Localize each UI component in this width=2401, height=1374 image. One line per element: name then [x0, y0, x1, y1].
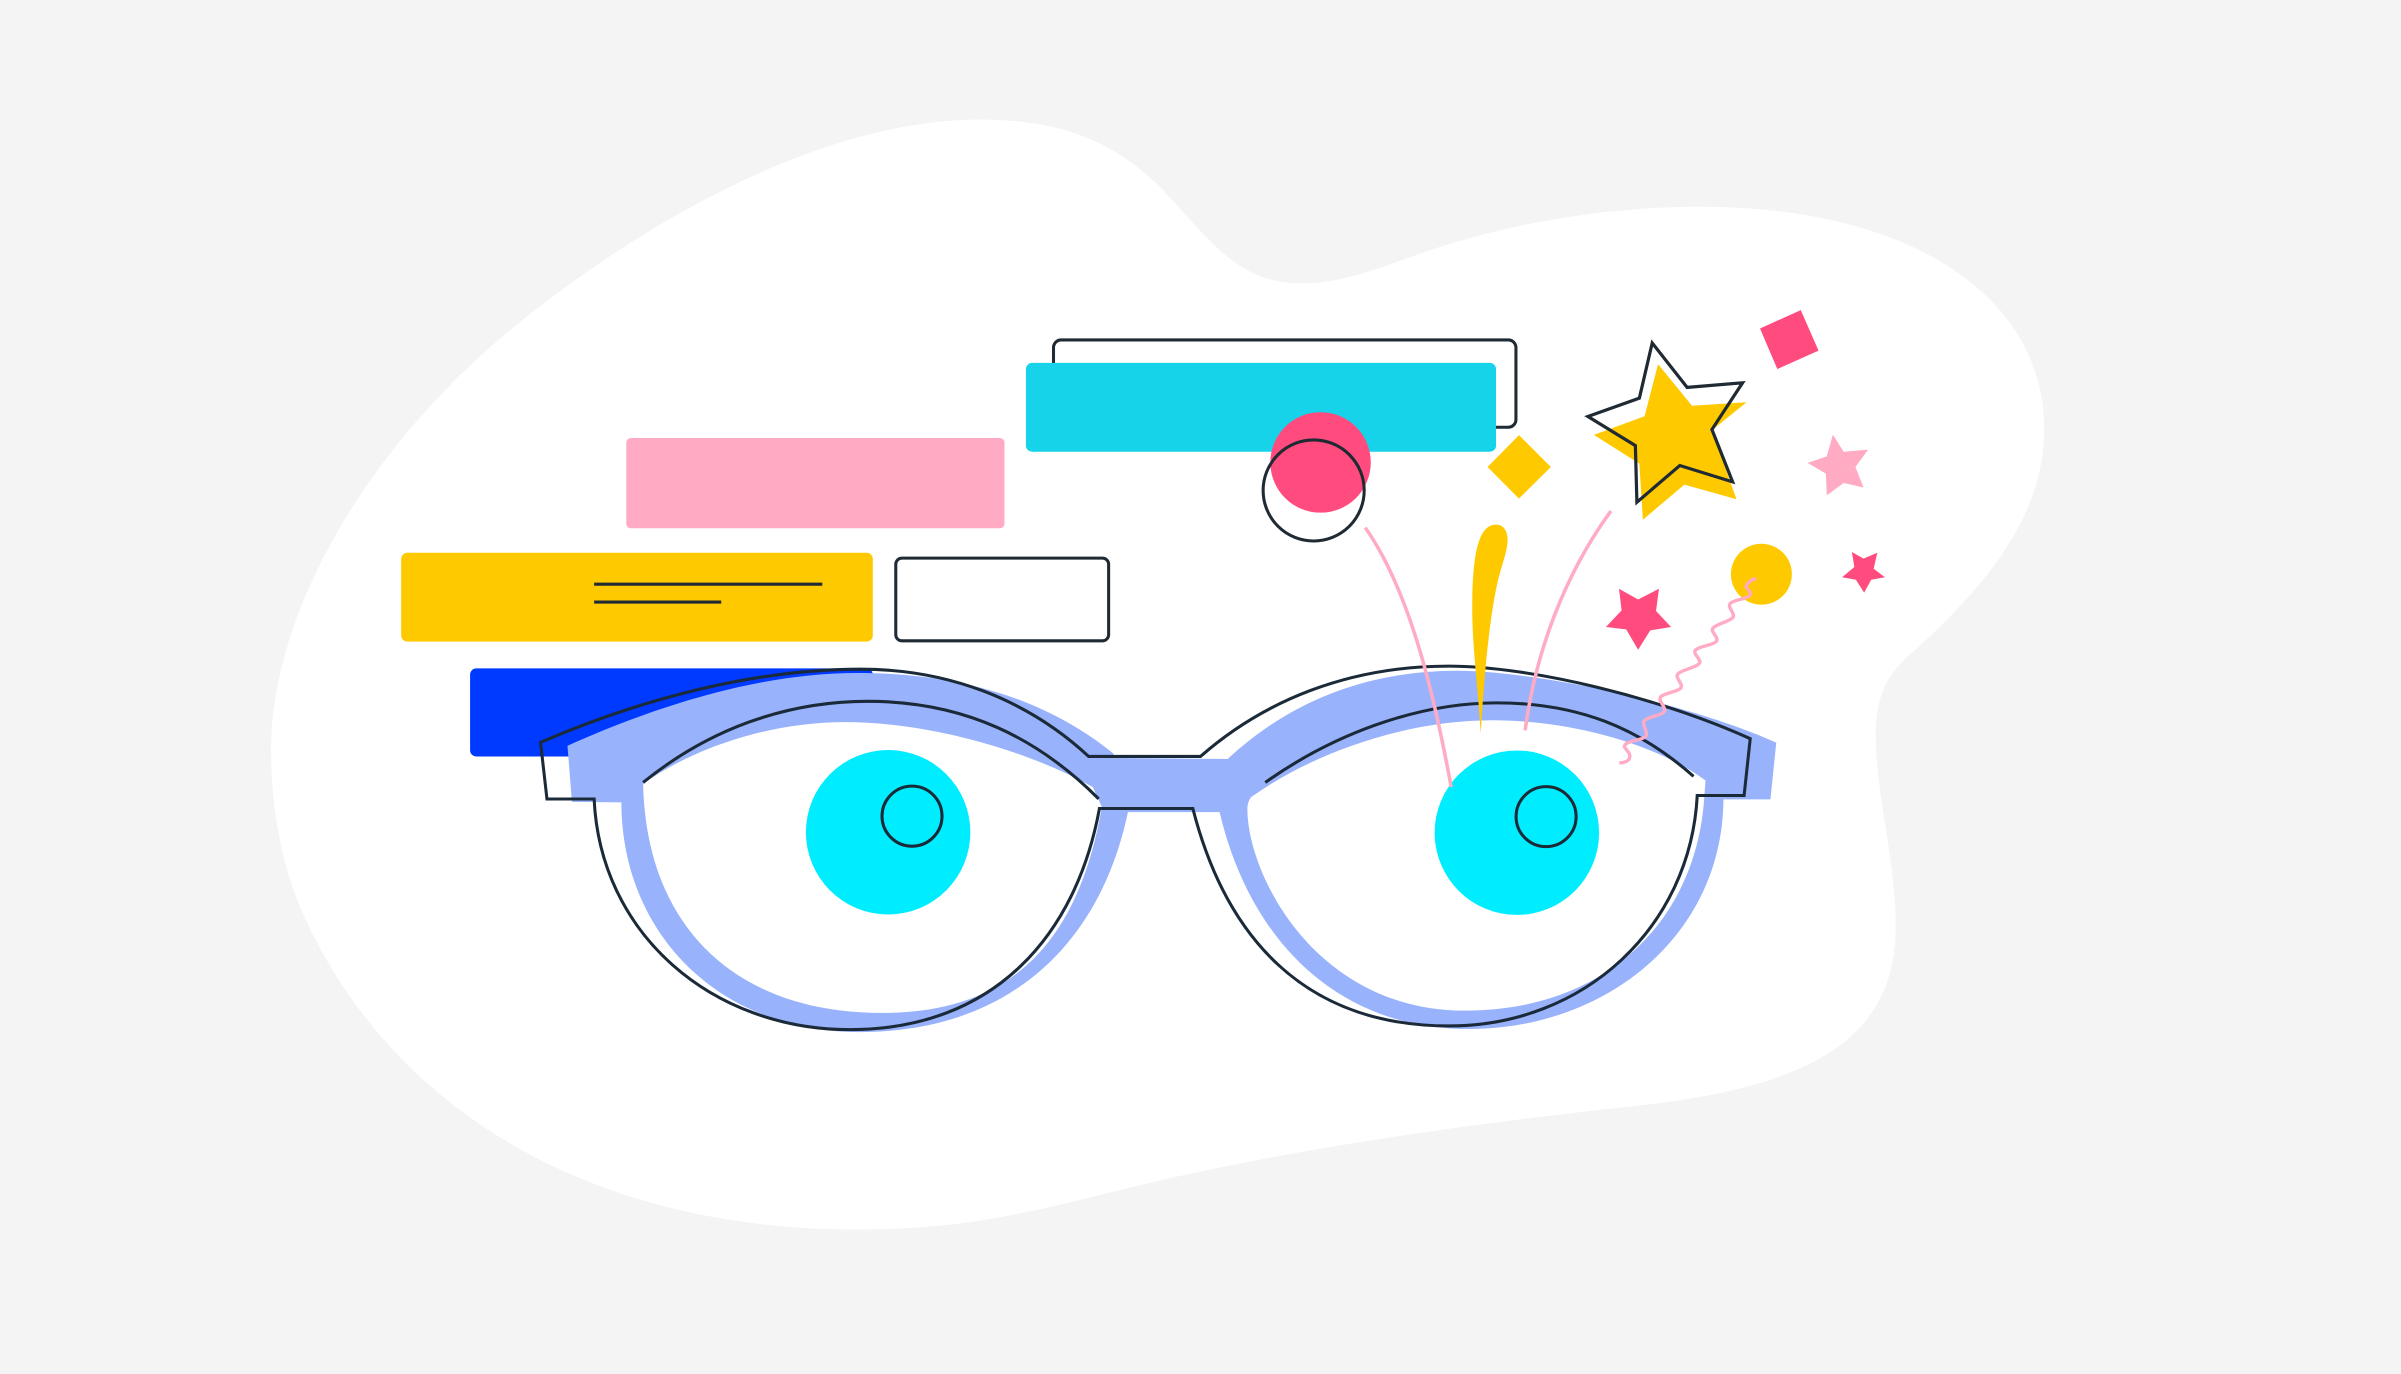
left lens opening — [643, 722, 1102, 1013]
pink diamond — [1760, 310, 1819, 369]
outlined star — [1588, 343, 1743, 502]
glasses — [541, 666, 1776, 1032]
left eye — [806, 750, 970, 914]
right pink line — [1525, 511, 1611, 730]
glasses frame fill — [567, 671, 1776, 1032]
yellow circle — [1731, 544, 1792, 605]
blue bar — [470, 668, 873, 756]
right pupil ring — [1516, 787, 1576, 847]
pink circle — [1270, 412, 1371, 513]
pink bar — [626, 438, 1004, 528]
right eye — [1435, 750, 1599, 915]
left pink line — [1365, 528, 1451, 787]
outlined circle — [1263, 440, 1364, 541]
left brow inner line — [643, 701, 1099, 799]
pink squiggle — [1619, 579, 1756, 763]
yellow star — [1594, 364, 1747, 520]
light pink star — [1808, 435, 1868, 495]
glasses outline — [541, 666, 1750, 1030]
yellow drop — [1472, 525, 1508, 733]
right brow inner line — [1265, 703, 1694, 782]
outlined bar middle — [896, 558, 1109, 641]
small pink star — [1842, 552, 1885, 593]
yellow diamond — [1488, 435, 1551, 499]
middle pink star — [1606, 589, 1671, 650]
outlined bar top — [1054, 340, 1516, 427]
cyan bar — [1026, 363, 1496, 452]
right lens opening — [1247, 720, 1706, 1011]
yellow bar with text lines — [401, 553, 873, 642]
left pupil ring — [882, 786, 942, 846]
white blob — [271, 119, 2044, 1230]
